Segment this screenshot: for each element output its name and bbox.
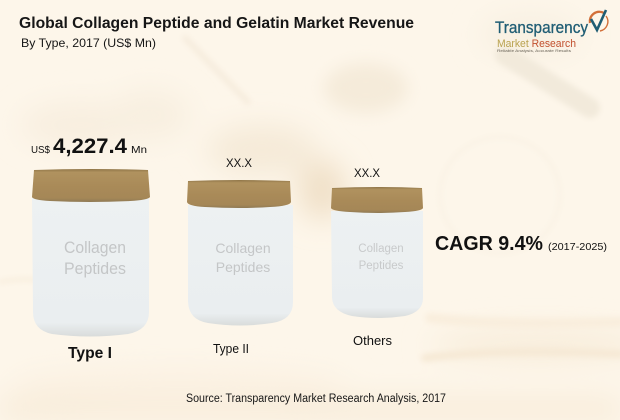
jar label: Collagen bbox=[358, 243, 404, 255]
category label: Type I: Type I bbox=[68, 345, 112, 362]
CAGR callout bbox=[435, 232, 607, 255]
value: Type I bbox=[31, 135, 147, 158]
logo second line: Market Research bbox=[497, 38, 576, 50]
logo check mark icon bbox=[590, 10, 608, 31]
category label: Others: Others bbox=[353, 334, 392, 348]
value: Type I: US$ bbox=[31, 144, 50, 156]
jar: Others bbox=[331, 187, 423, 318]
jar body bbox=[331, 211, 423, 318]
category label: Type II: Type II bbox=[213, 342, 249, 356]
jar: Type II bbox=[187, 180, 293, 326]
jar label: Peptides bbox=[216, 259, 270, 275]
title: Global Collagen Peptide and Gelatin Market Revenue bbox=[19, 15, 414, 32]
subtitle: By Type, 2017 (US$ Mn) bbox=[21, 36, 156, 50]
value: Type II: XX.X bbox=[226, 156, 252, 170]
jar label: Peptides bbox=[64, 259, 126, 278]
value: Type I: 4,227.4 bbox=[53, 135, 127, 158]
jar: Type I bbox=[32, 169, 150, 336]
logo tagline: Reliable Analysis, Accurate Results bbox=[497, 48, 571, 53]
jar body bbox=[188, 205, 293, 326]
value: Others: XX.X bbox=[354, 166, 380, 180]
jar body bbox=[32, 198, 149, 336]
jar lid bbox=[187, 180, 291, 208]
CAGR callout: (2017-2025) bbox=[548, 241, 607, 253]
jar label: Peptides bbox=[359, 260, 404, 272]
source note: Source: Transparency Market Research Analysis, 2017 bbox=[186, 393, 446, 405]
logo wordmark: Transparency bbox=[495, 19, 589, 37]
value: Type I: Mn bbox=[131, 144, 147, 156]
jar lid bbox=[32, 169, 150, 202]
jar label: Collagen bbox=[64, 238, 126, 257]
CAGR callout: CAGR 9.4% bbox=[435, 232, 543, 255]
logo: Transparency Market Research bbox=[495, 10, 608, 53]
jar label: Collagen bbox=[215, 240, 271, 256]
jar lid bbox=[331, 187, 423, 213]
